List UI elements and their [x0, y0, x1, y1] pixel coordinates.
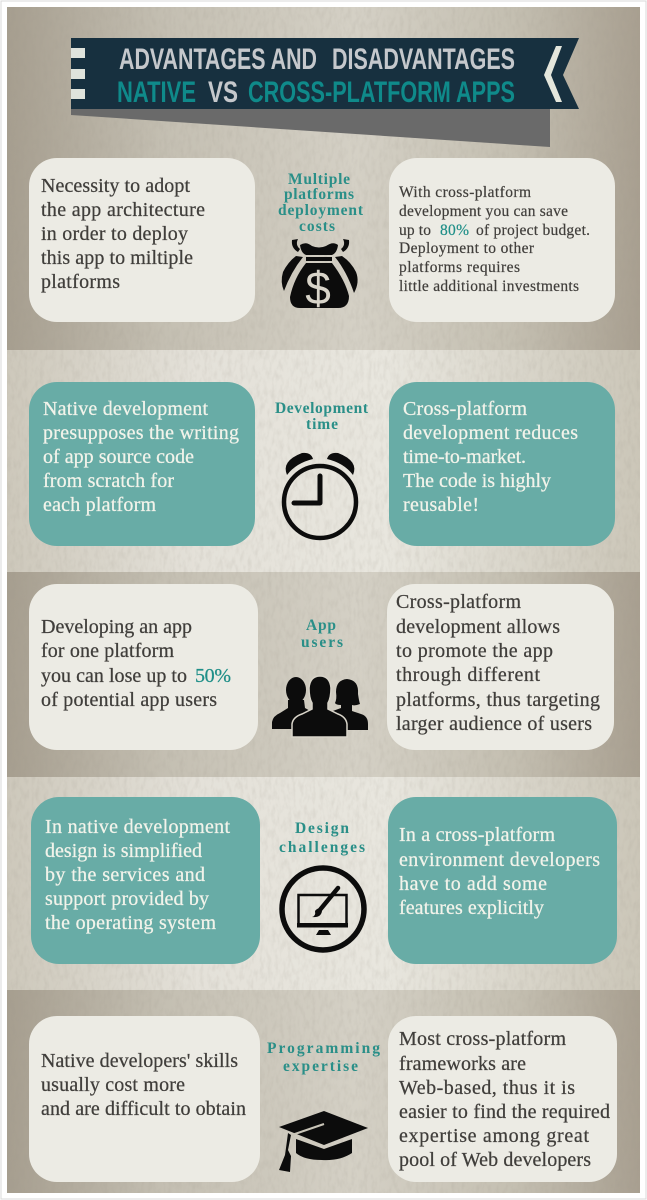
panel: cross-platform time — [389, 382, 615, 546]
panel: native design: design is simplified — [45, 840, 202, 862]
panel: cross-platform users: to promote the app — [396, 640, 553, 662]
panel: cross-platform expertise: frameworks are — [399, 1053, 526, 1075]
panel: native time: of app source code — [43, 446, 194, 468]
panel: cross-platform expertise: pool of Web developers — [399, 1149, 591, 1171]
panel: native design: support provided by — [45, 888, 209, 910]
title text: DISADVANTAGES — [332, 43, 515, 76]
heading: app users: users — [301, 634, 343, 651]
panel: native design — [31, 797, 260, 964]
heading: development time: Development — [275, 400, 369, 417]
panel: cross-platform users: Cross-platform — [396, 591, 521, 613]
icon: alarm clock — [284, 453, 356, 538]
icon: dollar sign: $ — [305, 262, 331, 314]
heading: multiple platforms deployment costs: platforms — [284, 186, 354, 203]
row 2: development time — [29, 382, 615, 546]
title banner — [71, 38, 579, 147]
panel: native time: from scratch for — [43, 470, 174, 492]
panel: native expertise: usually cost more — [41, 1074, 185, 1096]
panel: native design: In native development — [45, 816, 230, 838]
banner shadow — [71, 109, 550, 147]
ribbon chevron — [544, 46, 562, 102]
icon: money bag — [282, 239, 358, 314]
title text: NATIVE — [117, 76, 196, 109]
row 3: app users — [29, 584, 614, 750]
panel: cross-platform expertise — [388, 1016, 617, 1182]
panel: cross-platform costs — [389, 158, 615, 322]
panel: cross-platform design: have to add some — [399, 873, 547, 895]
panel: native expertise: and are difficult to obtain — [41, 1098, 246, 1120]
panel: cross-platform users — [387, 584, 614, 750]
heading: programming expertise: expertise — [283, 1058, 358, 1075]
ribbon — [71, 38, 579, 109]
panel: cross-platform time: reusable! — [403, 494, 479, 516]
heading: design challenges: challenges — [279, 839, 365, 856]
panel: cross-platform users: larger audience of users — [396, 713, 592, 735]
panel: cross-platform design: In a cross-platform — [399, 824, 555, 846]
panel: native users: you can lose up to — [41, 665, 187, 687]
heading: design challenges — [279, 820, 365, 856]
heading: multiple platforms deployment costs — [278, 171, 364, 235]
panel: native time — [29, 382, 255, 546]
panel: native users: for one platform — [41, 640, 174, 662]
panel: cross-platform users: through different — [396, 664, 540, 686]
panel: native costs: platforms — [41, 271, 120, 293]
panel: cross-platform users: platforms, thus targeting — [396, 689, 600, 711]
panel: cross-platform time: The code is highly — [403, 470, 551, 492]
heading: app users — [301, 617, 343, 651]
heading: development time — [275, 400, 369, 433]
title text: ADVANTAGES AND — [119, 43, 317, 76]
panel: native design: by the services and — [45, 864, 205, 886]
panel: cross-platform costs: 80% — [440, 222, 469, 239]
panel: cross-platform design: features explicitly — [399, 897, 544, 919]
heading: development time: time — [306, 416, 338, 433]
panel: cross-platform design: environment developers — [399, 849, 600, 871]
panel: cross-platform time: Cross-platform — [403, 398, 527, 420]
panel: cross-platform expertise: expertise among great — [399, 1125, 589, 1147]
panel: cross-platform expertise: Most cross-platform — [399, 1028, 566, 1050]
panel: native costs: this app to miltiple — [41, 247, 193, 269]
panel: cross-platform users: development allows — [396, 616, 560, 638]
heading: app users: App — [306, 617, 336, 634]
panel: native expertise — [29, 1016, 260, 1182]
panel: native users: 50% — [195, 665, 231, 687]
heading: multiple platforms deployment costs: Multiple — [288, 171, 350, 188]
panel: native time: Native development — [43, 398, 208, 420]
panel: native users: Developing an app — [41, 616, 192, 638]
panel: cross-platform costs: up to — [399, 222, 431, 239]
panel: native costs: Necessity to adopt — [41, 175, 190, 197]
heading: multiple platforms deployment costs: deployment — [278, 202, 364, 219]
panel: native design: the operating system — [45, 912, 216, 934]
icon: graduation cap — [279, 1111, 368, 1172]
panel: cross-platform costs: Deployment to other — [399, 240, 535, 257]
panel: native expertise: Native developers' skills — [41, 1050, 238, 1072]
panel: native time: presupposes the writing — [43, 422, 239, 444]
title text — [117, 43, 515, 109]
panel: native users — [29, 584, 258, 750]
heading: design challenges: Design — [295, 820, 349, 837]
panel: cross-platform costs: development you can save — [399, 203, 568, 220]
row 5: programming expertise — [29, 1016, 617, 1182]
icon: monitor with brush — [282, 868, 364, 950]
panel: cross-platform time: development reduces — [403, 422, 578, 444]
panel: cross-platform costs: With cross-platform — [399, 184, 531, 201]
panel: cross-platform costs: of project budget. — [476, 222, 590, 239]
panel: cross-platform expertise: Web-based, thus it is — [399, 1077, 575, 1099]
heading: programming expertise: Programming — [267, 1040, 380, 1057]
panel: native costs: in order to deploy — [41, 223, 188, 245]
title text: CROSS-PLATFORM APPS — [248, 76, 515, 109]
heading: programming expertise — [267, 1040, 380, 1075]
ribbon stripes — [71, 48, 85, 99]
panel: cross-platform time: time-to-market. — [403, 446, 526, 468]
panel: cross-platform costs: little additional investments — [399, 278, 579, 295]
panel: native time: each platform — [43, 494, 156, 516]
heading: multiple platforms deployment costs: costs — [299, 218, 335, 235]
icon: users — [272, 676, 368, 737]
row 1: multiple platforms deployment costs — [29, 158, 615, 322]
row 4: design challenges — [31, 797, 617, 964]
panel: cross-platform expertise: easier to find the required — [399, 1101, 610, 1123]
title text: VS — [208, 76, 238, 109]
panel: cross-platform design — [388, 797, 617, 964]
panel: cross-platform costs: platforms requires — [399, 259, 520, 276]
panel: native costs: the app architecture — [41, 199, 205, 221]
panel: native costs — [29, 158, 255, 322]
panel: native users: of potential app users — [41, 689, 217, 711]
